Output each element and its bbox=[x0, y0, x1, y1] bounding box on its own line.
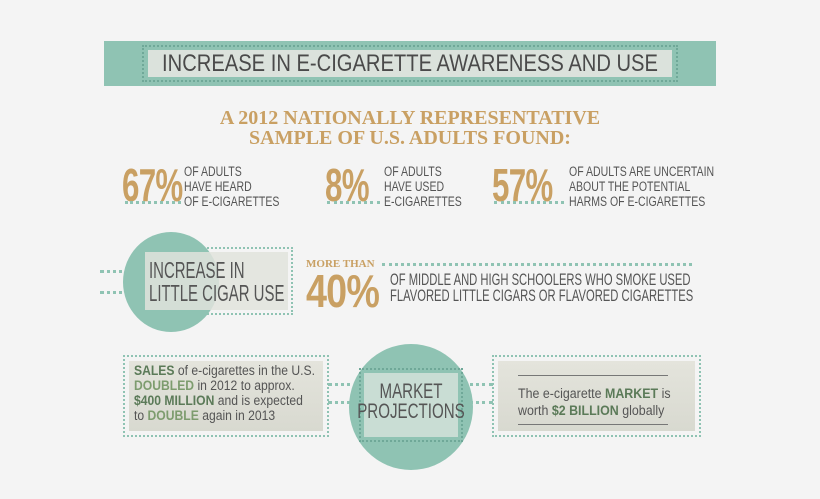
stat 57% bbox=[492, 159, 714, 211]
panel: sales: DOUBLED in 2012 to approx. bbox=[134, 378, 295, 393]
panel: sales: to DOUBLE again in 2013 bbox=[134, 408, 275, 423]
stat 8% bbox=[325, 159, 462, 211]
panel: sales bbox=[123, 355, 329, 437]
panel: market size bbox=[492, 355, 701, 437]
panel: little cigar bbox=[100, 232, 293, 332]
stat 67%: OF ADULTS bbox=[184, 164, 242, 179]
stat 67% bbox=[122, 159, 279, 211]
stat 40% bbox=[306, 258, 693, 317]
panel: sales: SALES of e-cigarettes in the U.S. bbox=[134, 363, 315, 378]
panel: sales: $400 MILLION and is expected bbox=[134, 393, 303, 408]
panel: market projections: MARKET bbox=[379, 380, 442, 403]
stat 8%: E-CIGARETTES bbox=[384, 194, 462, 209]
stat 8%: OF ADULTS bbox=[384, 164, 442, 179]
stat 67%: HAVE HEARD bbox=[184, 179, 252, 194]
connectors bbox=[328, 383, 358, 386]
stat 57%: OF ADULTS ARE UNCERTAIN bbox=[569, 164, 714, 179]
title banner bbox=[104, 41, 716, 86]
stat 57%: ABOUT THE POTENTIAL bbox=[569, 179, 690, 194]
heading: LITTLE CIGAR USE bbox=[149, 280, 284, 306]
stat 8%: HAVE USED bbox=[384, 179, 444, 194]
stat 67%: OF E-CIGARETTES bbox=[184, 194, 279, 209]
stat 40%: OF MIDDLE AND HIGH SCHOOLERS WHO SMOKE USED bbox=[390, 270, 690, 289]
subtitle bbox=[220, 107, 600, 149]
stat 40%: MORE THAN bbox=[306, 258, 375, 270]
heading: INCREASE IN bbox=[149, 257, 245, 283]
panel: market size: The e-cigarette MARKET is bbox=[518, 386, 671, 401]
subtitle: SAMPLE OF U.S. ADULTS FOUND: bbox=[249, 127, 571, 149]
panel: market projections: PROJECTIONS bbox=[357, 400, 465, 423]
title: INCREASE IN E-CIGARETTE AWARENESS AND USE bbox=[162, 50, 658, 77]
panel: market projections bbox=[349, 344, 473, 470]
stat 40%: 40% bbox=[306, 265, 379, 317]
stat 57%: 57% bbox=[492, 159, 553, 211]
subtitle: A 2012 NATIONALLY REPRESENTATIVE bbox=[220, 107, 600, 129]
panel: market size: worth $2 BILLION globally bbox=[518, 403, 664, 418]
stat 67%: 67% bbox=[122, 159, 183, 211]
stat 8%: 8% bbox=[325, 159, 369, 211]
heading bbox=[149, 257, 284, 306]
stat 40%: FLAVORED LITTLE CIGARS OR FLAVORED CIGARETTES bbox=[390, 286, 693, 305]
stat 57%: HARMS OF E-CIGARETTES bbox=[569, 194, 705, 209]
